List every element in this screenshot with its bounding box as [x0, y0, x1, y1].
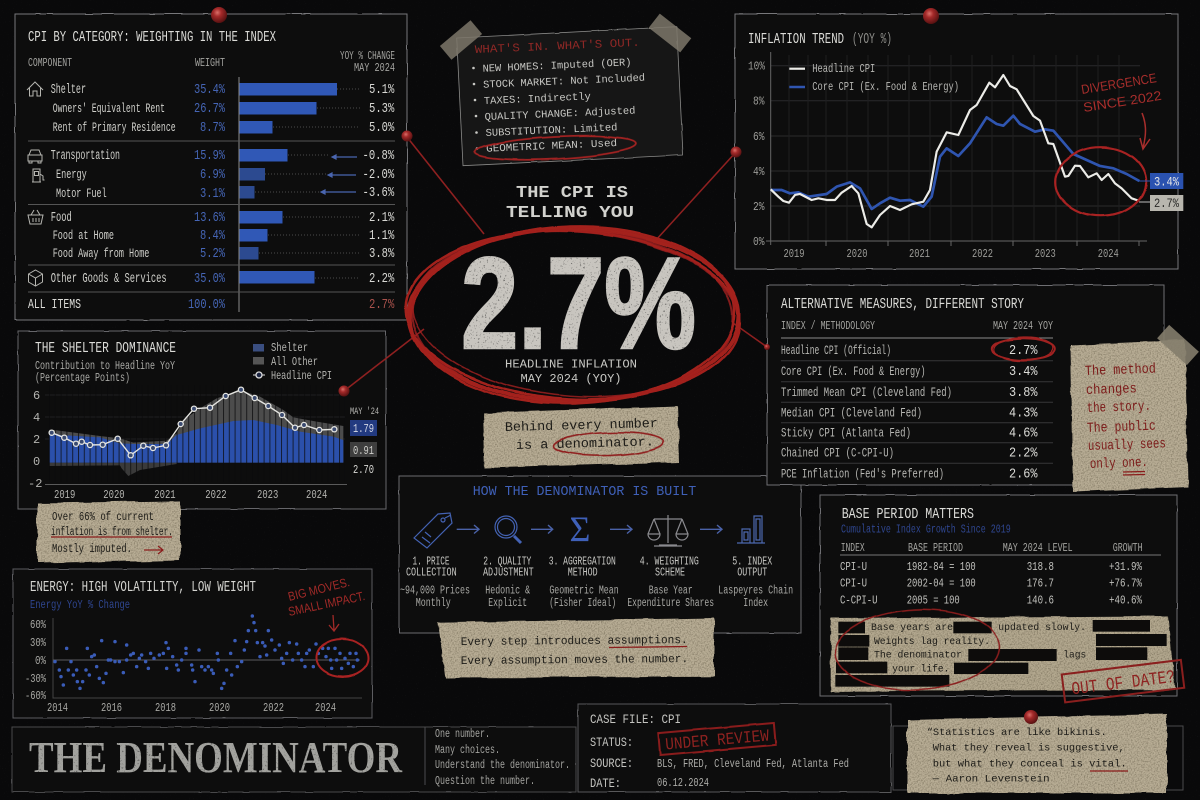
memo text: lags — [1063, 650, 1086, 662]
weight values: 35.0% — [194, 272, 226, 287]
heading: base period matters: BASE PERIOD MATTERS — [842, 506, 974, 523]
step descriptions: Laspeyres Chain — [718, 585, 793, 598]
stamp: under review: UNDER REVIEW — [665, 727, 771, 755]
panel: base period matters — [820, 495, 1177, 696]
table rows: 2002-04 = 100 — [907, 577, 976, 591]
measure values: 4.3% — [1009, 406, 1038, 422]
note text: inflation is from shelter. — [51, 526, 173, 539]
row labels — [28, 83, 176, 313]
row labels: Food — [51, 211, 72, 226]
chart axis labels: 8% — [753, 96, 765, 108]
table header — [781, 320, 1053, 333]
chart axis labels: 0 — [33, 455, 40, 469]
table header: MAY 2024 LEVEL — [1003, 542, 1073, 555]
caption: headline inflation — [505, 358, 637, 386]
chart legend: Headline CPI — [812, 62, 875, 76]
step titles: 3. AGGREGATION — [549, 555, 616, 568]
icon: balance scale — [648, 515, 688, 546]
chart axis labels: 2024 — [1098, 248, 1119, 261]
chart legend: Shelter — [271, 341, 308, 355]
chart axis labels: 30% — [30, 637, 46, 650]
red underline and arrow — [51, 537, 172, 554]
chart axis labels — [28, 389, 327, 502]
memo text: updated slowly. — [998, 622, 1086, 634]
chart axis labels: 2020 — [103, 488, 125, 502]
decline arrows — [321, 155, 357, 194]
measure names: Headline CPI (Official) — [781, 344, 891, 358]
chart axis labels: 0% — [35, 655, 46, 668]
note list: NEW HOMES: Imputed (OER) — [482, 57, 632, 76]
stamp: out of date: OUT OF DATE? — [1071, 668, 1176, 700]
table header: INDEX — [841, 542, 865, 555]
memo text: The denominator — [874, 650, 962, 662]
heading unit: (YOY %) — [852, 31, 892, 48]
handwritten text: the story. — [1087, 399, 1151, 417]
May 2024 readout — [350, 406, 379, 477]
memo text: Weights lag reality. — [874, 636, 990, 648]
step descriptions: Hedonic & — [485, 585, 530, 598]
step descriptions: Base Year — [649, 585, 693, 598]
handwritten text — [1085, 362, 1166, 473]
red circle on headline value — [992, 336, 1055, 362]
weight values: 8.4% — [200, 229, 226, 244]
chart axis labels: 2024 — [306, 488, 327, 502]
May 2024 readout: 1.79 — [353, 422, 374, 436]
step icons — [414, 509, 765, 549]
row labels: Food Away from Home — [53, 247, 149, 261]
note: redacted base years memo — [831, 606, 1184, 702]
chart axis labels: 2024 — [315, 702, 336, 715]
weight values: 100.0% — [188, 298, 226, 313]
annotation: big moves small impact — [287, 575, 368, 677]
chart axis labels: 2016 — [101, 702, 122, 715]
chart axes — [766, 52, 1147, 246]
step titles: SCHEME — [655, 567, 685, 580]
step titles: METHOD — [568, 567, 598, 580]
chart axis labels: 2022 — [972, 248, 993, 261]
measure names: Chained CPI (C-CPI-U) — [781, 447, 894, 461]
YoY values: -3.6% — [362, 185, 395, 201]
weight values — [188, 83, 226, 313]
caption: headline inflation: HEADLINE INFLATION — [505, 358, 637, 372]
measure values: 2.2% — [1009, 446, 1038, 462]
chart axis labels: 2021 — [909, 248, 930, 261]
quote text — [927, 727, 1127, 786]
note text: Behind every number — [505, 416, 658, 435]
chart subtitle — [35, 359, 175, 385]
note list: GEOMETRIC MEAN: Used — [486, 138, 617, 156]
table rows: C-CPI-U — [840, 593, 878, 607]
May 2024 readout: 0.91 — [353, 444, 374, 458]
weight values: 35.4% — [194, 83, 226, 98]
weight values: 5.2% — [200, 247, 226, 262]
chart axis labels: 4% — [753, 166, 765, 179]
YoY values: 2.1% — [369, 210, 395, 226]
headline: the CPI is telling you: THE CPI IS — [516, 184, 628, 203]
dotted leaders — [255, 89, 360, 278]
chart axis labels: 2% — [753, 201, 765, 214]
panel: how the denominator is built — [399, 476, 801, 633]
step titles: 1. PRICE — [412, 555, 450, 568]
note text — [51, 511, 173, 556]
tape — [1157, 325, 1199, 365]
chart axis labels: 2023 — [257, 488, 278, 502]
chart subtitle: Contribution to Headline YoY — [35, 359, 175, 373]
table rows: 176.7 — [1027, 577, 1054, 591]
table header: MAY 2024 YOY — [993, 320, 1053, 333]
chart: core CPI line — [771, 116, 1139, 209]
note text: Every assumption moves the number. — [461, 653, 688, 668]
chart legend — [253, 341, 332, 383]
note text — [461, 634, 688, 668]
scatter chart — [53, 616, 362, 698]
end value tags: 2.7% — [1154, 196, 1179, 211]
note list — [472, 57, 645, 156]
measure values — [1009, 343, 1038, 482]
case file values: BLS, FRED, Cleveland Fed, Atlanta Fed — [657, 758, 849, 771]
chart axis labels: 2022 — [205, 488, 227, 502]
note heading: WHAT'S IN. WHAT'S OUT. — [475, 37, 640, 57]
chart axis labels: -2 — [28, 477, 42, 491]
chart axis labels: 0% — [753, 236, 765, 249]
table rows: CPI-U — [840, 577, 867, 591]
divider — [424, 727, 426, 785]
row labels: ALL ITEMS — [28, 297, 81, 313]
YoY values: 5.3% — [369, 101, 395, 117]
red pins — [211, 7, 1038, 724]
heading: CPI by category: CPI BY CATEGORY: WEIGHTING IN THE INDEX — [28, 29, 276, 46]
tagline: Understand the denominator. — [435, 759, 570, 772]
chart legend: Headline CPI — [271, 369, 332, 383]
step titles: 5. INDEX — [732, 555, 772, 568]
YoY values: 3.8% — [369, 246, 395, 262]
heading: energy: ENERGY: HIGH VOLATILITY, LOW WEIGHT — [30, 579, 256, 596]
note: the method changes the story — [1070, 325, 1199, 492]
tagline: Many choices. — [435, 744, 500, 757]
measure names: PCE Inflation (Fed's Preferred) — [781, 467, 944, 481]
table header: MAY 2024 — [354, 62, 395, 75]
chart axis labels: 60% — [30, 619, 46, 632]
measure values: 2.7% — [1009, 343, 1038, 359]
chart axis labels: 2023 — [1035, 248, 1056, 261]
row labels: Owners' Equivalent Rent — [53, 102, 165, 116]
table header — [840, 542, 1161, 555]
chart axis labels: 2021 — [154, 488, 176, 502]
measure names: Median CPI (Cleveland Fed) — [781, 407, 922, 421]
red underline — [609, 646, 687, 648]
table rows: CPI-U — [840, 560, 867, 574]
table rows: 140.6 — [1027, 593, 1054, 607]
table header: BASE PERIOD — [908, 542, 963, 555]
red circle around denominator — [554, 431, 664, 457]
quote text: — Aaron Levenstein — [932, 774, 1050, 786]
note: behind every number — [483, 406, 680, 468]
May 2024 readout: 2.70 — [353, 463, 374, 477]
note: what's in what's out — [440, 14, 691, 166]
step titles: ADJUSTMENT — [483, 567, 534, 580]
weight values: 15.9% — [194, 149, 226, 164]
table header: INDEX / METHODOLOGY — [781, 320, 875, 333]
table rows: 318.8 — [1027, 560, 1054, 574]
chart axis labels: 2 — [33, 433, 40, 447]
step titles: OUTPUT — [737, 567, 767, 580]
end value tags — [1139, 173, 1183, 211]
case file labels: SOURCE: — [590, 756, 633, 771]
annotation: divergence: DIVERGENCE — [1080, 70, 1158, 97]
panel: title band — [12, 727, 576, 792]
heading: how the denominator is built: HOW THE DENOMINATOR IS BUILT — [473, 484, 696, 500]
annotation: divergence — [1056, 70, 1162, 216]
note list: STOCK MARKET: Not Included — [483, 73, 645, 92]
icon: price tag — [414, 513, 452, 548]
heading: inflation trend: INFLATION TREND — [748, 31, 844, 48]
panel: case file — [578, 704, 891, 792]
step descriptions — [400, 585, 793, 610]
step arrows — [457, 525, 722, 534]
connector lines with pins — [344, 137, 767, 391]
weight values: 13.6% — [194, 211, 226, 226]
chart legend — [789, 62, 959, 94]
annotation: big moves small impact: BIG MOVES. — [287, 575, 351, 604]
chart axis labels — [25, 619, 336, 715]
tagline: Question the number. — [435, 775, 535, 788]
measure names: Sticky CPI (Atlanta Fed) — [781, 427, 911, 441]
row labels: Rent of Primary Residence — [53, 121, 176, 135]
title: the denominator: THE DENOMINATOR — [29, 733, 403, 782]
step descriptions: Monthly — [416, 597, 451, 610]
memo text: your life. — [892, 664, 949, 676]
icon: sigma: Σ — [570, 509, 590, 549]
table lines — [781, 338, 1053, 463]
panel: inflation trend — [735, 14, 1183, 269]
YoY values: -2.0% — [362, 167, 395, 183]
memo text: Base years are — [871, 622, 953, 634]
chart axis labels: -60% — [25, 690, 46, 703]
row labels: Energy — [56, 168, 87, 182]
note list: TAXES: Indirectly — [484, 91, 591, 108]
step descriptions: (Fisher Ideal) — [549, 597, 616, 610]
measure values: 2.6% — [1009, 466, 1038, 482]
YoY values: 5.0% — [369, 120, 395, 136]
tagline: One number. — [435, 728, 490, 741]
row labels: Other Goods & Services — [51, 272, 167, 287]
step descriptions: Geometric Mean — [549, 585, 619, 598]
quote text: “Statistics are like bikinis. — [927, 727, 1107, 739]
case file values: 06.12.2024 — [657, 777, 709, 790]
YoY values: 5.1% — [369, 82, 395, 98]
handwritten text: The public — [1087, 419, 1156, 437]
YoY values: 2.2% — [369, 271, 395, 287]
note text: Over 66% of current — [52, 511, 154, 524]
chart axis labels: 2014 — [47, 702, 68, 715]
weight values: 3.1% — [200, 187, 226, 202]
memo text — [871, 622, 1086, 676]
step titles: 2. QUALITY — [483, 555, 531, 568]
measure values: 3.4% — [1009, 364, 1038, 380]
note: Levenstein quote — [907, 714, 1167, 793]
heading: shelter dominance: THE SHELTER DOMINANCE — [35, 340, 176, 357]
tagline — [435, 728, 570, 788]
May 2024 readout: MAY '24 — [350, 406, 379, 418]
table header: GROWTH — [1113, 542, 1143, 555]
line chart grid — [771, 55, 1140, 241]
end value tags: 3.4% — [1154, 174, 1179, 190]
table rows: 2005 = 100 — [907, 593, 960, 607]
step descriptions: Index — [743, 597, 768, 610]
YoY values: -0.8% — [362, 148, 395, 164]
chart axis labels: 2018 — [155, 702, 176, 715]
quote text: What they reveal is suggestive, — [933, 743, 1125, 755]
chart axis labels: 4 — [33, 411, 40, 425]
table header: COMPONENT — [28, 57, 72, 70]
red circle around geometric mean — [474, 133, 636, 163]
chart axis labels: 2019 — [784, 248, 805, 261]
big number: 2.7%: 2.7% — [461, 230, 696, 376]
weight values: 26.7% — [194, 102, 226, 117]
table rows: +40.6% — [1109, 593, 1143, 607]
panel: quote frame — [893, 726, 1183, 790]
case file labels — [590, 712, 681, 791]
note text: Every step introduces assumptions. — [461, 634, 688, 649]
handwritten text: changes — [1086, 381, 1137, 399]
axis and separators — [28, 77, 395, 312]
chart axis labels: 2022 — [263, 702, 284, 715]
measure values: 4.6% — [1009, 426, 1038, 442]
table rows: +31.9% — [1109, 560, 1143, 574]
stacked contribution chart — [45, 385, 347, 484]
chart subtitle: Energy YoY % Change — [30, 598, 130, 612]
weight values: 8.7% — [200, 121, 226, 136]
heading: alternative measures: ALTERNATIVE MEASURES, DIFFERENT STORY — [781, 296, 1024, 313]
chart legend: All Other — [271, 355, 318, 369]
chart axis labels: 6% — [753, 131, 765, 144]
measure names: Core CPI (Ex. Food & Energy) — [781, 365, 926, 379]
panel: alternative measures — [767, 285, 1164, 485]
table header: WEIGHT — [195, 57, 225, 70]
YoY values: 2.7% — [369, 297, 395, 313]
YoY values — [362, 82, 395, 313]
table header — [28, 50, 395, 75]
tape pieces — [440, 14, 691, 60]
chart axis labels: 10% — [748, 60, 765, 74]
step descriptions: ~94,000 Prices — [400, 585, 470, 598]
chart subtitle: (Percentage Points) — [35, 371, 130, 385]
chart legend: Core CPI (Ex. Food & Energy) — [812, 80, 959, 94]
row labels: Food at Home — [53, 229, 114, 243]
step descriptions: Explicit — [488, 597, 527, 610]
caption: headline inflation: MAY 2024 (YOY) — [520, 372, 622, 386]
panel: energy volatility — [13, 569, 372, 718]
note list: SUBSTITUTION: Limited — [485, 122, 618, 140]
table header: YOY % CHANGE — [340, 50, 395, 63]
note text — [505, 416, 658, 453]
annotation: big moves small impact: SMALL IMPACT. — [287, 589, 366, 619]
annotation: divergence: SINCE 2022 — [1082, 88, 1162, 115]
red ellipse around 2.7% — [402, 221, 744, 409]
headline: the CPI is telling you — [506, 184, 634, 223]
note: every step introduces assumptions — [438, 618, 714, 678]
row labels: Shelter — [51, 83, 86, 98]
case file labels: STATUS: — [590, 735, 633, 750]
case file labels: DATE: — [590, 776, 621, 791]
subtitle: Cumulative Index Growth Since 2019 — [841, 523, 1011, 536]
row labels: Transportation — [51, 149, 120, 164]
table rows — [840, 560, 1143, 607]
note list: QUALITY CHANGE: Adjusted — [484, 105, 636, 124]
step descriptions: Expenditure Shares — [627, 597, 714, 610]
measure values: 3.8% — [1009, 385, 1038, 401]
handwritten text: usually sees — [1088, 436, 1166, 455]
row labels: Motor Fuel — [56, 187, 107, 201]
red underline — [1090, 770, 1128, 772]
handwritten text: The method — [1085, 362, 1156, 380]
icon: magnifier — [495, 516, 521, 543]
icon: bar chart output — [737, 516, 765, 543]
table rows: 1982-84 = 100 — [907, 560, 976, 574]
step titles: COLLECTION — [406, 567, 457, 580]
chart axis labels: 2020 — [846, 248, 868, 261]
chart axis labels: -30% — [25, 673, 46, 686]
weight values: 6.9% — [200, 168, 226, 183]
double underline — [1123, 472, 1145, 475]
note text: is a denominator. — [516, 434, 654, 453]
note text: Mostly imputed. — [52, 543, 132, 556]
case file labels: CASE FILE: CPI — [590, 712, 681, 727]
chart: headline CPI line — [771, 75, 1138, 227]
measure names: Trimmed Mean CPI (Cleveland Fed) — [781, 386, 952, 400]
note: over 66 percent — [37, 501, 180, 563]
measure names — [781, 344, 952, 481]
chart axis labels: 6 — [33, 389, 40, 403]
step titles: 4. WEIGHTING — [640, 555, 699, 568]
table rows: +76.7% — [1109, 577, 1143, 591]
headline: the CPI is telling you: TELLING YOU — [506, 204, 634, 223]
quote text: but what they conceal is vital. — [933, 758, 1127, 770]
panel: shelter dominance — [18, 331, 386, 509]
category icons — [27, 82, 44, 286]
case file values — [657, 758, 849, 790]
panel: CPI by category — [15, 14, 407, 320]
handwritten text: only one. — [1090, 455, 1148, 473]
step titles — [406, 555, 772, 580]
red ellipse — [833, 606, 1001, 694]
weight bars — [240, 83, 337, 284]
chart axis labels: 2020 — [209, 702, 230, 715]
redaction bars — [835, 620, 1167, 687]
chart axis labels: 2019 — [54, 488, 75, 502]
YoY values: 1.1% — [369, 228, 395, 244]
chart axis labels — [748, 60, 1119, 261]
